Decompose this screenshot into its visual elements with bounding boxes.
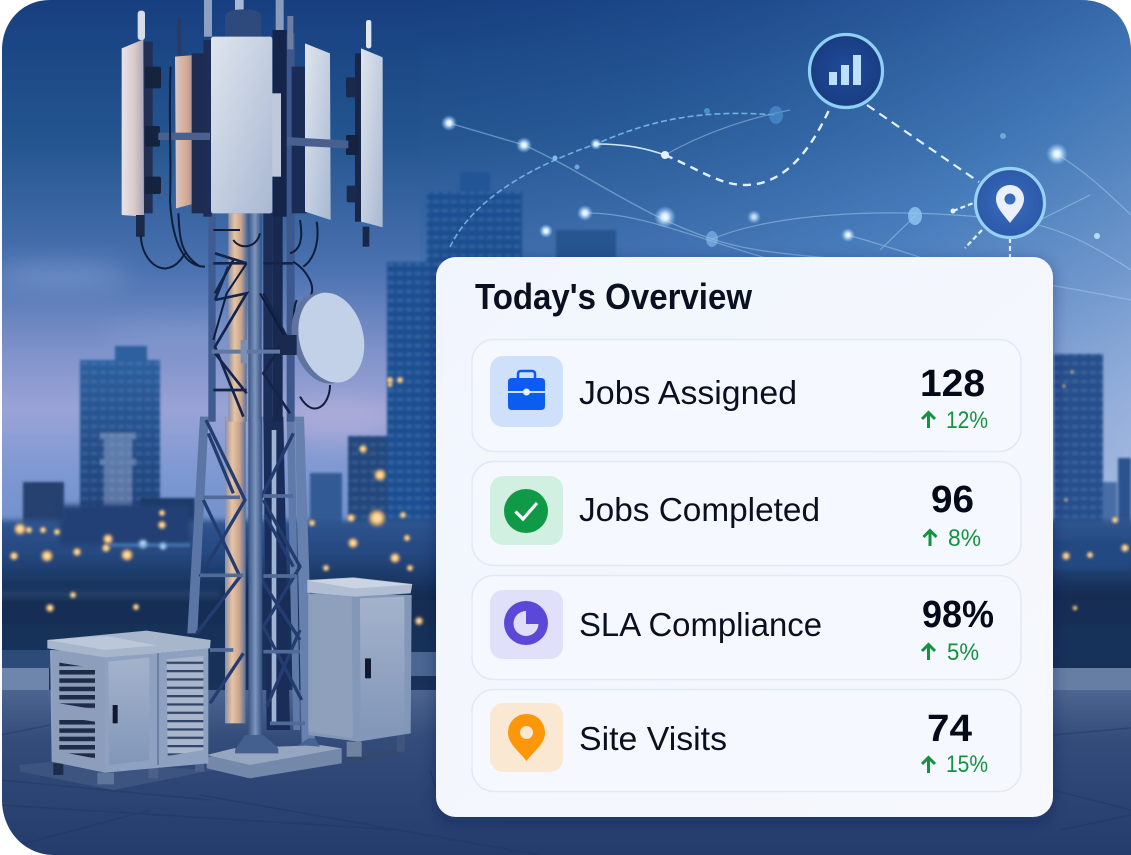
tower base (207, 735, 342, 778)
second antenna (175, 53, 205, 213)
change (922, 639, 979, 666)
tower top antennas (122, 0, 383, 422)
row: jobs assigned (472, 340, 1021, 452)
change (922, 407, 988, 434)
change (924, 525, 981, 552)
lattice upper braces (212, 253, 295, 417)
value: 98% (922, 594, 994, 636)
right antenna (346, 20, 383, 247)
change: 15% (946, 751, 988, 778)
label: Site Visits (579, 720, 727, 757)
icon: orange pin (490, 703, 563, 772)
node: location pin (976, 168, 1044, 238)
roof parapet (0, 650, 1131, 693)
heading: Today's Overview (475, 276, 753, 317)
network glow points (441, 106, 1100, 247)
label: Jobs Assigned (579, 374, 797, 411)
row: site visits (472, 690, 1021, 792)
lattice upper (203, 30, 295, 422)
value: 128 (920, 363, 985, 405)
tower warm tube (225, 417, 246, 723)
value: 74 (927, 708, 972, 750)
left antenna (122, 11, 161, 237)
centre panel (211, 37, 272, 213)
tower lattice (187, 417, 342, 778)
label: SLA Compliance (579, 606, 822, 643)
antenna poles (177, 0, 293, 55)
tower centre pole (248, 417, 262, 740)
skyline buildings (21, 172, 1131, 524)
tower legs (187, 417, 315, 743)
row: jobs completed (472, 462, 1021, 566)
panel: today's overview card (436, 257, 1053, 817)
change: 8% (948, 525, 981, 552)
dish (280, 292, 364, 384)
icon: pie (490, 590, 563, 659)
tower braces (197, 420, 305, 723)
arms (158, 30, 348, 217)
change: 5% (947, 639, 979, 666)
network connection lines (449, 105, 1131, 300)
icon: briefcase (490, 356, 563, 427)
left equipment cabinet (19, 631, 213, 790)
city ground band (0, 505, 1131, 700)
node: bar chart (810, 34, 882, 108)
right equipment cabinet (307, 577, 417, 763)
change (922, 751, 988, 778)
icon: check circle (490, 476, 563, 545)
label: Jobs Completed (579, 491, 820, 528)
change: 12% (946, 407, 988, 434)
value: 96 (931, 479, 974, 521)
rooftop floor (0, 690, 1131, 855)
cables (141, 67, 330, 409)
right inner antenna (292, 43, 331, 220)
sky (2, 0, 1131, 524)
row: sla compliance (472, 576, 1021, 680)
city lights (9, 370, 1130, 626)
